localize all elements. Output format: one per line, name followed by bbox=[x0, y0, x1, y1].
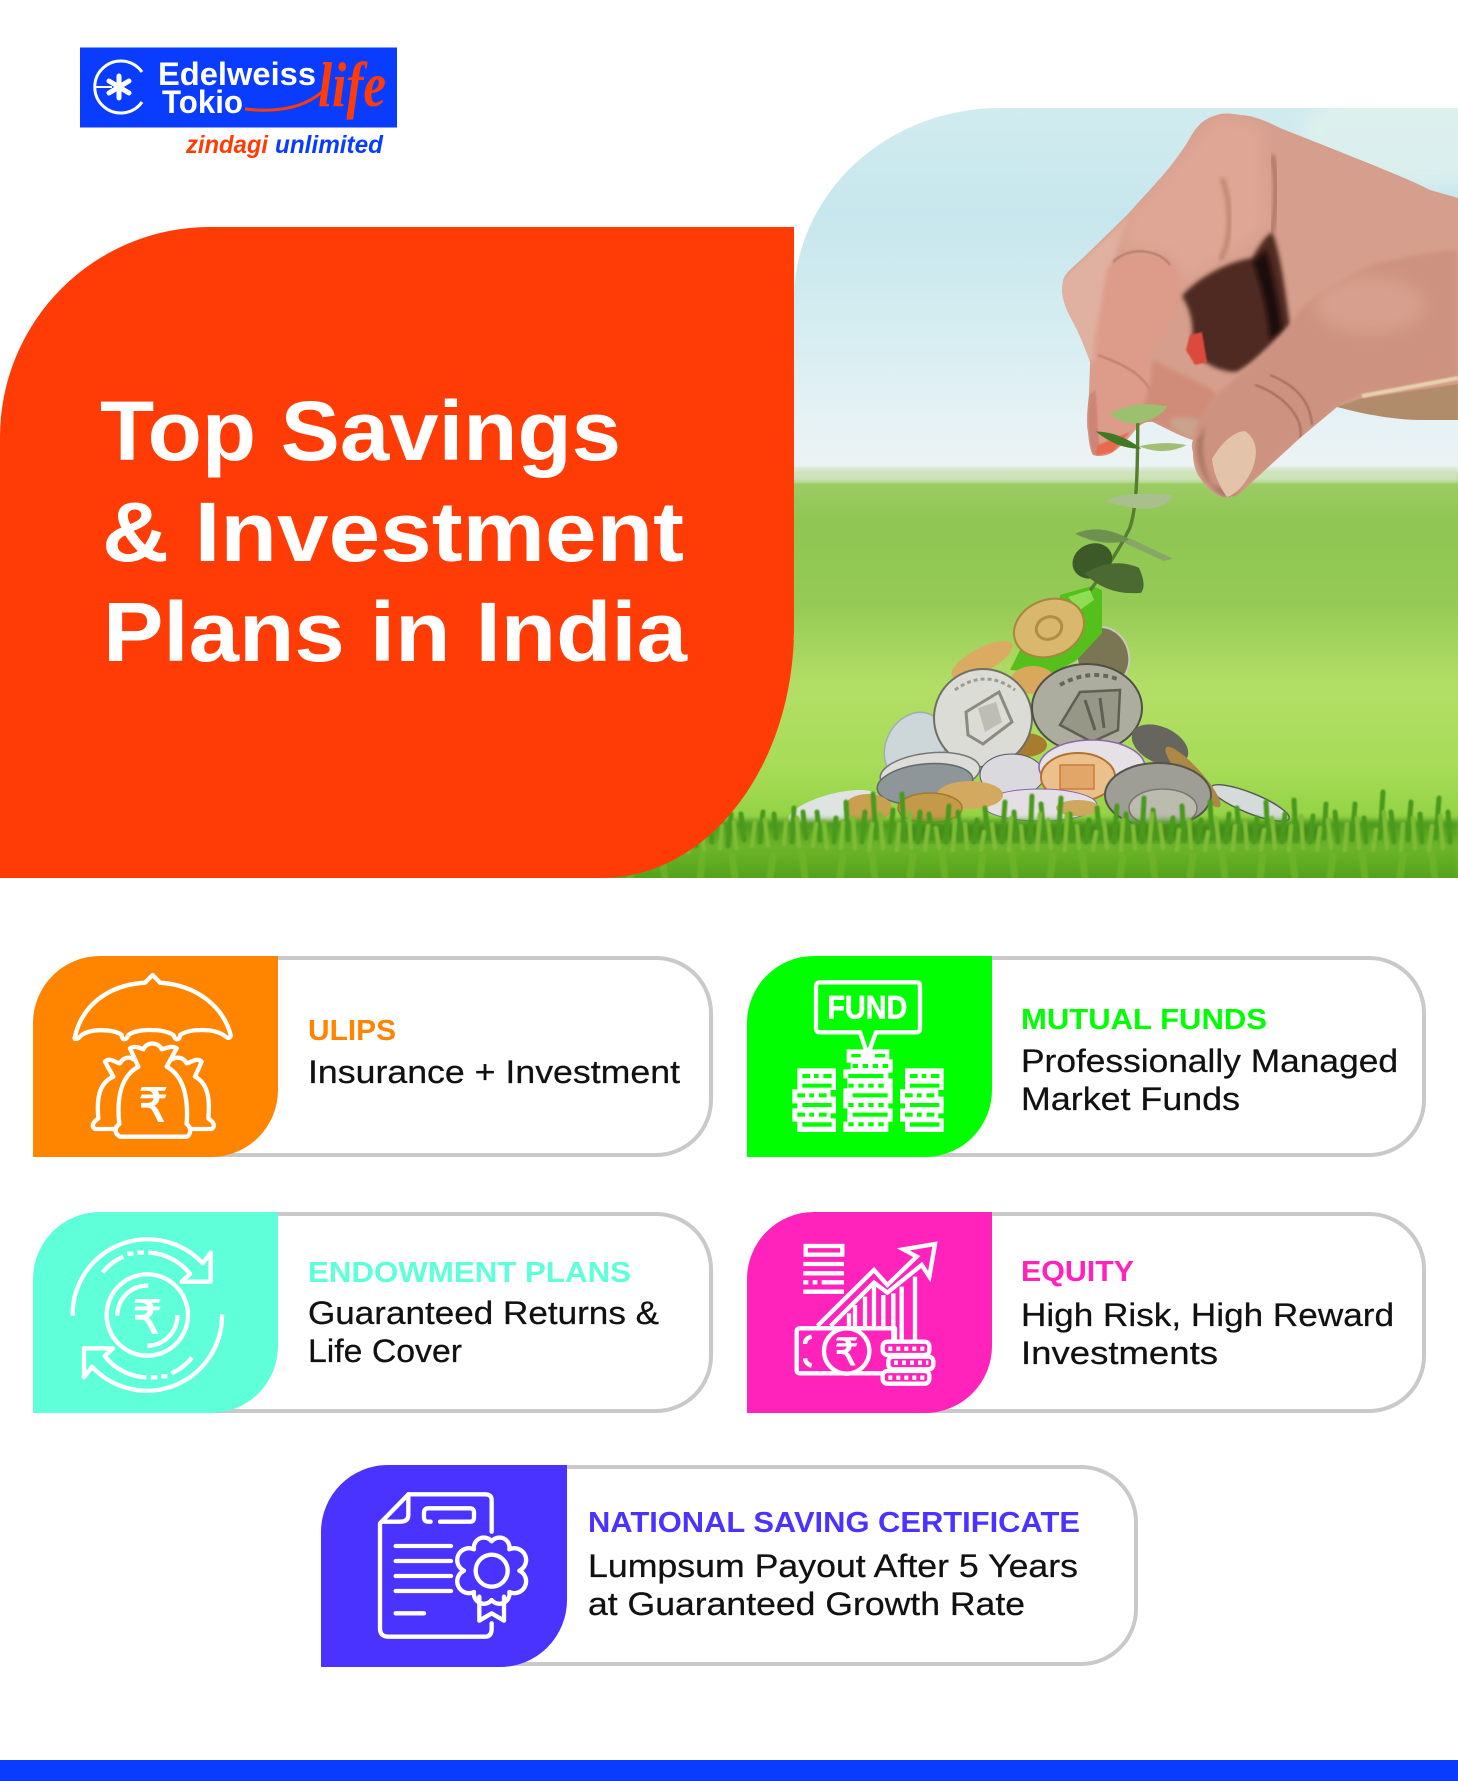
icon: fund bubble over coin stacks: FUND bbox=[827, 989, 907, 1025]
lower right coin bbox=[1105, 763, 1211, 827]
text: Mutual Funds: MUTUAL FUNDS bbox=[1021, 1004, 1267, 1036]
text: National Saving Certificate bbox=[588, 1507, 1080, 1622]
icon: fund bubble over coin stacks bbox=[792, 982, 944, 1132]
photo: hand planting sprout on coin pile in grass bbox=[580, 85, 1458, 886]
text: Mutual Funds bbox=[1021, 1004, 1398, 1117]
title bbox=[100, 384, 688, 679]
logo tagline: unlimited bbox=[275, 131, 384, 159]
middle stack bbox=[843, 1049, 893, 1132]
text: Endowment Plans bbox=[308, 1257, 659, 1369]
green sprout base bbox=[1010, 586, 1102, 673]
text: ULIPs: Insurance + Investment bbox=[308, 1054, 680, 1090]
text: Mutual Funds: Market Funds bbox=[1021, 1081, 1240, 1117]
index finger bbox=[1087, 266, 1134, 453]
large right coin bbox=[1032, 664, 1142, 752]
icon: umbrella over money bags: ₹ bbox=[138, 1080, 168, 1134]
logo bbox=[80, 48, 397, 159]
sprout bbox=[1067, 404, 1187, 593]
icon: umbrella over money bags bbox=[75, 975, 231, 1137]
text: ULIPs bbox=[308, 1015, 680, 1090]
thumbnail bbox=[1212, 431, 1256, 497]
logo wordmark bbox=[158, 56, 316, 120]
icon: growth chart with cash and coins bbox=[797, 1244, 935, 1384]
text: Endowment Plans: ENDOWMENT PLANS bbox=[308, 1257, 631, 1289]
logo swoosh and life script: life bbox=[318, 49, 386, 120]
icon tile: Endowment Plans bbox=[33, 1212, 278, 1413]
icon: rupee coin with circular arrows: ₹ bbox=[132, 1291, 162, 1345]
icon: logo flower bbox=[94, 61, 142, 113]
left stack bbox=[792, 1068, 836, 1132]
logo wordmark: Tokio bbox=[162, 84, 243, 120]
wrist underside bbox=[1338, 384, 1458, 420]
panel: Endowment Plans card bbox=[33, 1212, 711, 1413]
text: Equity bbox=[1021, 1256, 1394, 1371]
icon tile: Equity bbox=[747, 1212, 992, 1413]
title: Top Savings bbox=[100, 384, 621, 478]
panel: National Saving Certificate card bbox=[321, 1465, 1136, 1667]
text: Mutual Funds: Professionally Managed bbox=[1021, 1043, 1398, 1079]
coin pile bbox=[785, 586, 1293, 833]
knuckle finger bbox=[1131, 125, 1258, 268]
panel: title background bbox=[0, 227, 794, 878]
icon: certificate with seal bbox=[380, 1494, 526, 1637]
icon tile: ULIPs bbox=[33, 956, 278, 1157]
right stack bbox=[900, 1068, 944, 1132]
text: Endowment Plans: Life Cover bbox=[308, 1333, 462, 1369]
text: Endowment Plans: Guaranteed Returns & bbox=[308, 1295, 659, 1331]
logo swoosh and life script bbox=[245, 49, 386, 120]
hand bbox=[1050, 105, 1458, 505]
icon tile: National Saving Certificate bbox=[321, 1465, 567, 1667]
icon: growth chart with cash and coins: ₹ bbox=[835, 1330, 859, 1374]
logo tagline bbox=[185, 131, 384, 159]
dark cavity bbox=[1182, 232, 1290, 372]
footer bar bbox=[0, 1760, 1458, 1781]
text: National Saving Certificate: NATIONAL SAVING CERTIFICATE bbox=[588, 1507, 1080, 1539]
title: Plans in India bbox=[103, 585, 688, 679]
grass foreground bbox=[580, 792, 1458, 886]
panel: Equity card bbox=[747, 1212, 1424, 1413]
text: ULIPs: ULIPS bbox=[308, 1015, 396, 1047]
logo wordmark: Edelweiss bbox=[158, 56, 316, 92]
panel: ULIPs card bbox=[33, 956, 711, 1157]
text: Equity: EQUITY bbox=[1021, 1256, 1134, 1288]
text: Equity: Investments bbox=[1021, 1335, 1218, 1371]
icon tile: Mutual Funds bbox=[747, 956, 992, 1157]
orange coin bbox=[1041, 753, 1115, 801]
title: & Investment bbox=[102, 485, 684, 579]
large left coin bbox=[934, 669, 1032, 767]
text: National Saving Certificate: Lumpsum Payout After 5 Years bbox=[588, 1548, 1078, 1584]
text: National Saving Certificate: at Guaranteed Growth Rate bbox=[588, 1586, 1025, 1622]
under finger bbox=[1137, 360, 1217, 440]
logo tagline: zindagi bbox=[185, 131, 269, 159]
text: Equity: High Risk, High Reward bbox=[1021, 1297, 1394, 1333]
thumb bbox=[1193, 250, 1458, 497]
left back finger bbox=[1062, 222, 1124, 362]
icon: rupee coin with circular arrows bbox=[73, 1239, 222, 1391]
panel: Mutual Funds card bbox=[747, 956, 1424, 1157]
